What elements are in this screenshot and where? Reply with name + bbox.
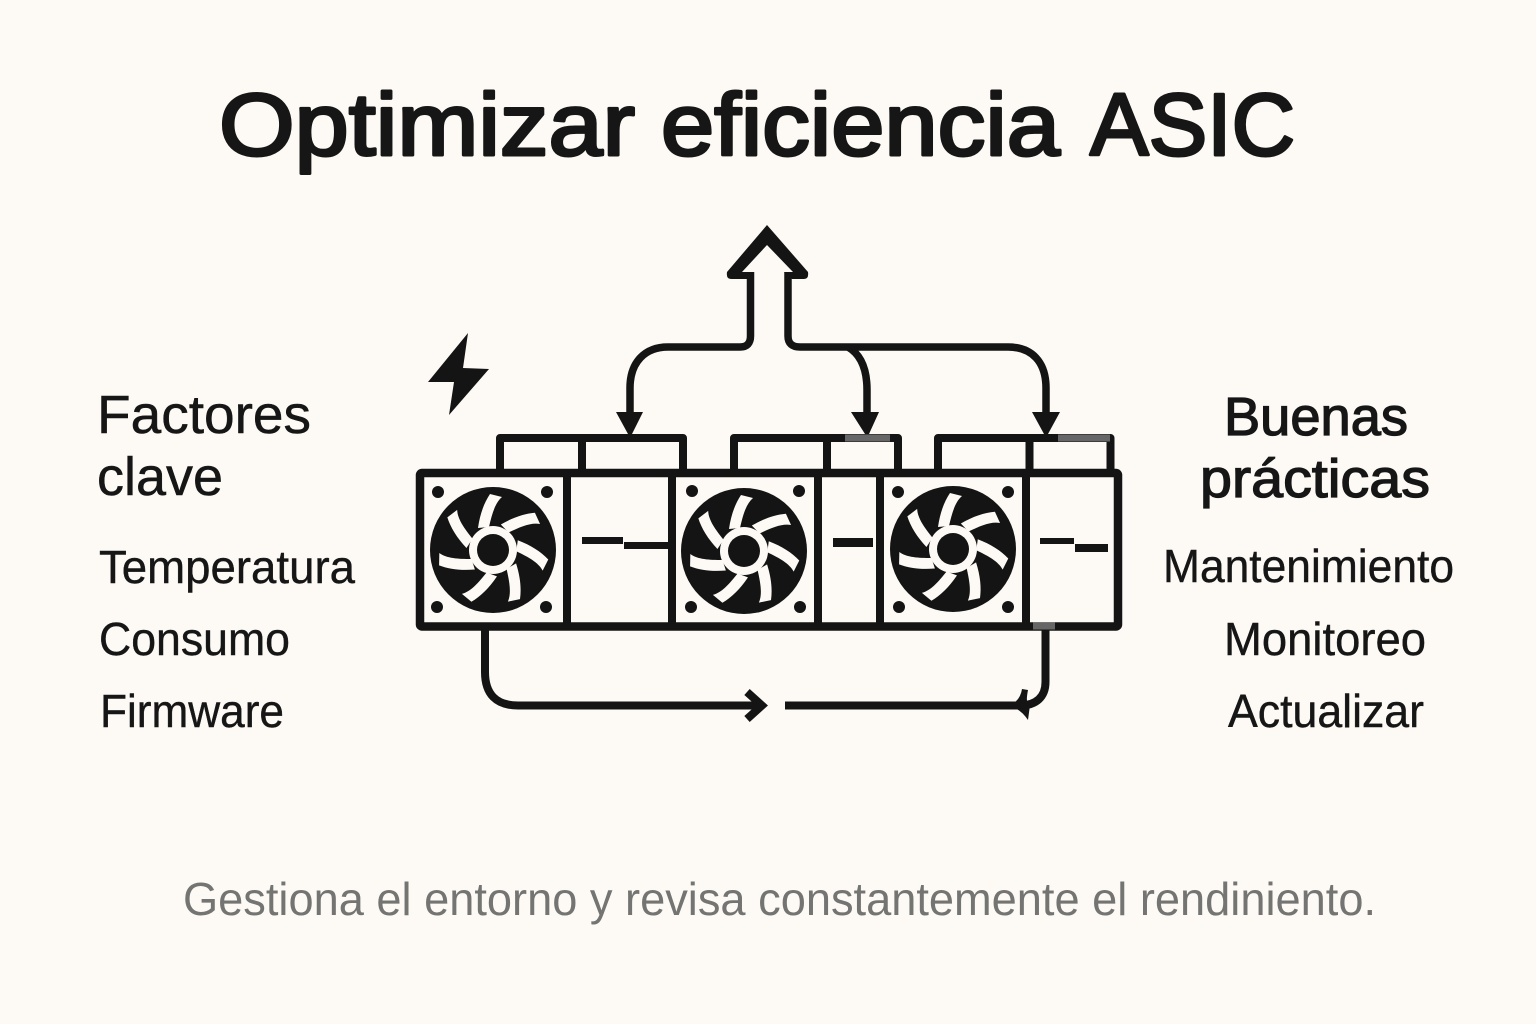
- list: factores: Temperatura: [99, 541, 355, 593]
- arrow: upward outlet with branches: [630, 272, 1046, 414]
- list: practicas: [1163, 540, 1454, 737]
- top connector boxes: [500, 438, 1110, 473]
- heading: factores clave: [97, 385, 311, 507]
- diagram: ASIC miner: [420, 225, 1118, 720]
- title: Optimizar: [219, 75, 635, 174]
- fan 2: [681, 485, 807, 614]
- heading: factores clave: Factores: [97, 385, 311, 445]
- heading: buenas practicas: prácticas: [1200, 449, 1430, 509]
- icon: lightning bolt: [428, 333, 489, 415]
- arrow: bottom left flow: [485, 629, 762, 719]
- title: ASIC: [1090, 75, 1295, 174]
- list: factores: Firmware: [100, 685, 284, 737]
- title: eficiencia: [661, 75, 1060, 174]
- list: practicas: Actualizar: [1228, 685, 1424, 737]
- arrow: upward outlet head: [727, 225, 808, 279]
- arrow: bottom right flow: [785, 626, 1055, 720]
- status dashes: [582, 537, 1108, 552]
- fan 3: [890, 486, 1016, 613]
- panel: buenas practicas: [1163, 387, 1454, 737]
- heading: factores clave: clave: [97, 447, 223, 507]
- title: [219, 75, 1295, 174]
- fan 1: [430, 486, 556, 613]
- arrowheads: down to units: [616, 412, 1060, 434]
- heading: buenas practicas: Buenas: [1224, 387, 1408, 447]
- panel: factores clave: [97, 385, 355, 737]
- list: practicas: Monitoreo: [1224, 613, 1426, 665]
- list: factores: [99, 541, 355, 737]
- main chassis: [420, 473, 1118, 626]
- heading: buenas practicas: [1200, 387, 1430, 509]
- list: practicas: Mantenimiento: [1163, 540, 1454, 592]
- footer note: Gestiona el entorno y revisa constantemente el rendiniento.: [183, 873, 1376, 925]
- list: factores: Consumo: [99, 613, 290, 665]
